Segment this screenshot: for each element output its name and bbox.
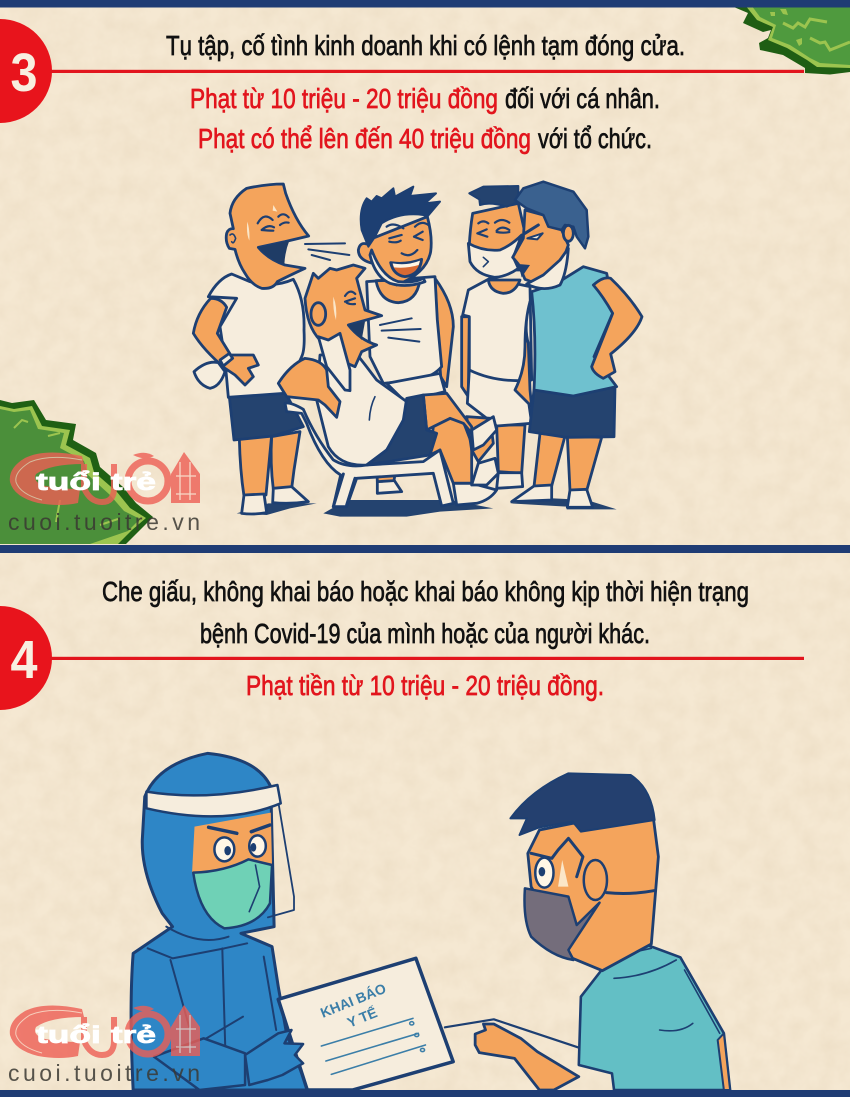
far shoe bbox=[377, 480, 402, 493]
bush: top right bbox=[735, 8, 850, 74]
man: white tee and mask bbox=[462, 186, 532, 488]
section 4 heading bbox=[102, 576, 749, 649]
ground shadows bbox=[237, 498, 617, 517]
man: standing bald, white shirt bbox=[193, 184, 349, 514]
section 4 watermark bbox=[8, 1005, 200, 1086]
section 3 number badge bbox=[0, 19, 52, 123]
surgical mask bbox=[193, 859, 272, 928]
bush: bottom left of section 3 bbox=[0, 400, 153, 544]
section 3 fine: organisations: với tổ chức. bbox=[538, 123, 652, 154]
shorts bbox=[229, 392, 303, 440]
illustration: medical worker and man with declaration form bbox=[131, 753, 730, 1090]
shirt bbox=[579, 945, 730, 1090]
face shield bbox=[268, 802, 294, 917]
torso bbox=[317, 354, 407, 465]
section divider bar bbox=[0, 545, 850, 553]
section 4 watermark: cuoi.tuoitre.vn bbox=[8, 1060, 200, 1086]
section 4 number badge: 4 bbox=[10, 630, 38, 690]
suit bbox=[131, 753, 308, 1090]
logo bbox=[10, 1005, 200, 1058]
man with grey mask bbox=[445, 773, 730, 1090]
man: centre, spiky hair, tank top bbox=[358, 187, 453, 402]
speech lines bbox=[305, 243, 349, 260]
section 3 heading: Tụ tập, cố tình kinh doanh khi có lệnh tạm đóng cửa. bbox=[166, 30, 685, 61]
logo: tuổi trẻ bbox=[36, 1022, 156, 1049]
form label text: KHAI BÁO bbox=[318, 980, 388, 1021]
head bbox=[226, 184, 309, 288]
medical worker bbox=[131, 753, 308, 1090]
form edge behind hand bbox=[445, 1019, 581, 1048]
section 4 fine: Phạt tiền từ 10 triệu - 20 triệu đồng. bbox=[246, 670, 604, 701]
section 4 number badge bbox=[0, 606, 52, 710]
held mask bbox=[194, 362, 225, 388]
form label text: Y TẾ bbox=[345, 1004, 379, 1031]
head bbox=[528, 818, 658, 971]
logo bbox=[10, 452, 200, 505]
gloved hand bbox=[245, 1030, 303, 1085]
shorts bbox=[367, 395, 437, 465]
watermark: section 3: cuoi.tuoitre.vn bbox=[8, 509, 200, 535]
sleeve bbox=[154, 1038, 245, 1090]
bottom navy bar bbox=[0, 1090, 850, 1097]
watermark: section 3 bbox=[8, 452, 200, 535]
section 3 red rule bbox=[50, 70, 804, 73]
chair bbox=[285, 403, 453, 507]
near leg bbox=[430, 418, 472, 483]
head bbox=[305, 265, 382, 367]
section 3 fine: organisations: Phạt có thể lên đến 40 triệu đồng bbox=[198, 123, 531, 154]
illustration: five people gathering without masks bbox=[193, 182, 642, 517]
hanging mask bbox=[318, 333, 350, 391]
seated man on chair bbox=[278, 265, 498, 507]
legs bbox=[239, 435, 272, 496]
face bbox=[192, 813, 272, 873]
section 3 number badge: 3 bbox=[10, 43, 38, 103]
section 3 fine: individuals: Phạt từ 10 triệu - 20 triệu đồng bbox=[190, 83, 498, 114]
grey mask bbox=[524, 888, 600, 960]
arm bbox=[193, 298, 258, 385]
section 4 red rule bbox=[50, 657, 804, 660]
arm bbox=[278, 358, 340, 417]
shirt bbox=[208, 274, 304, 397]
section 4 heading: bệnh Covid-19 của mình hoặc của người khác. bbox=[200, 618, 650, 649]
crossed leg and shoes bbox=[467, 417, 493, 462]
section 3 fine: individuals: đối với cá nhân. bbox=[505, 83, 660, 114]
arm and hand bbox=[475, 1024, 579, 1090]
top navy bar bbox=[0, 0, 850, 8]
logo: tuổi trẻ bbox=[36, 469, 156, 496]
clipboard form bbox=[278, 958, 453, 1090]
man: cyan tank top, mask under chin bbox=[512, 182, 642, 507]
